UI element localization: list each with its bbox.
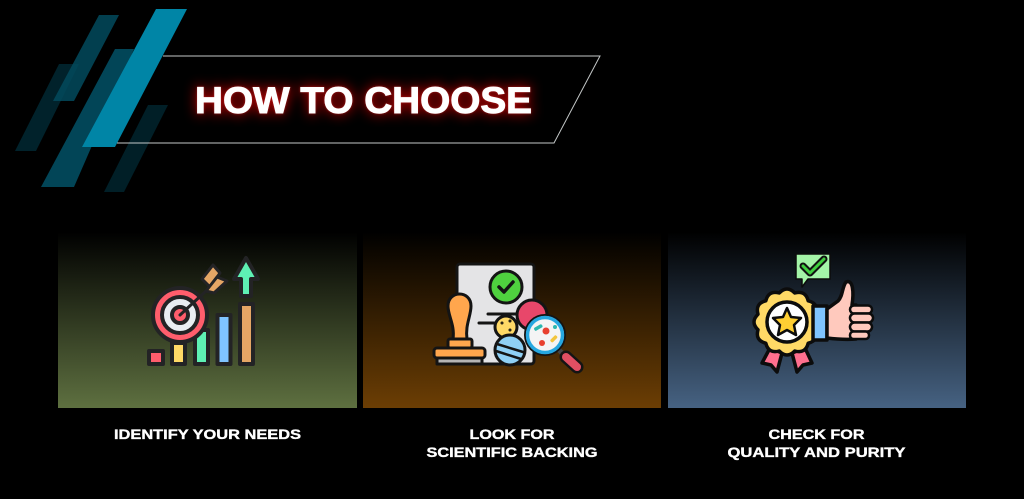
title: HOW TO CHOOSE [195,79,532,121]
decorative slanted bars [15,9,187,192]
caption: look for scientific backing: LOOK FOR [470,427,555,442]
panel: quality and purity [668,232,966,408]
caption: check for quality and purity: QUALITY AND PURITY [728,445,906,460]
title: HOW TO CHOOSE [195,79,532,121]
icon: target and growth bars [149,258,258,364]
caption: look for scientific backing [426,427,598,460]
caption: identify your needs: IDENTIFY YOUR NEEDS [114,427,301,442]
title: HOW TO CHOOSE [195,79,532,121]
panel: scientific backing [363,232,661,408]
caption: check for quality and purity [728,427,906,460]
title banner frame [117,56,600,143]
caption: check for quality and purity: CHECK FOR [768,427,865,442]
icon: certified document with stamp, pills and magnifier [434,264,577,367]
caption: look for scientific backing: SCIENTIFIC BACKING [426,445,598,460]
panel: identify your needs [58,232,357,408]
icon: quality badge and thumbs up [754,254,873,372]
